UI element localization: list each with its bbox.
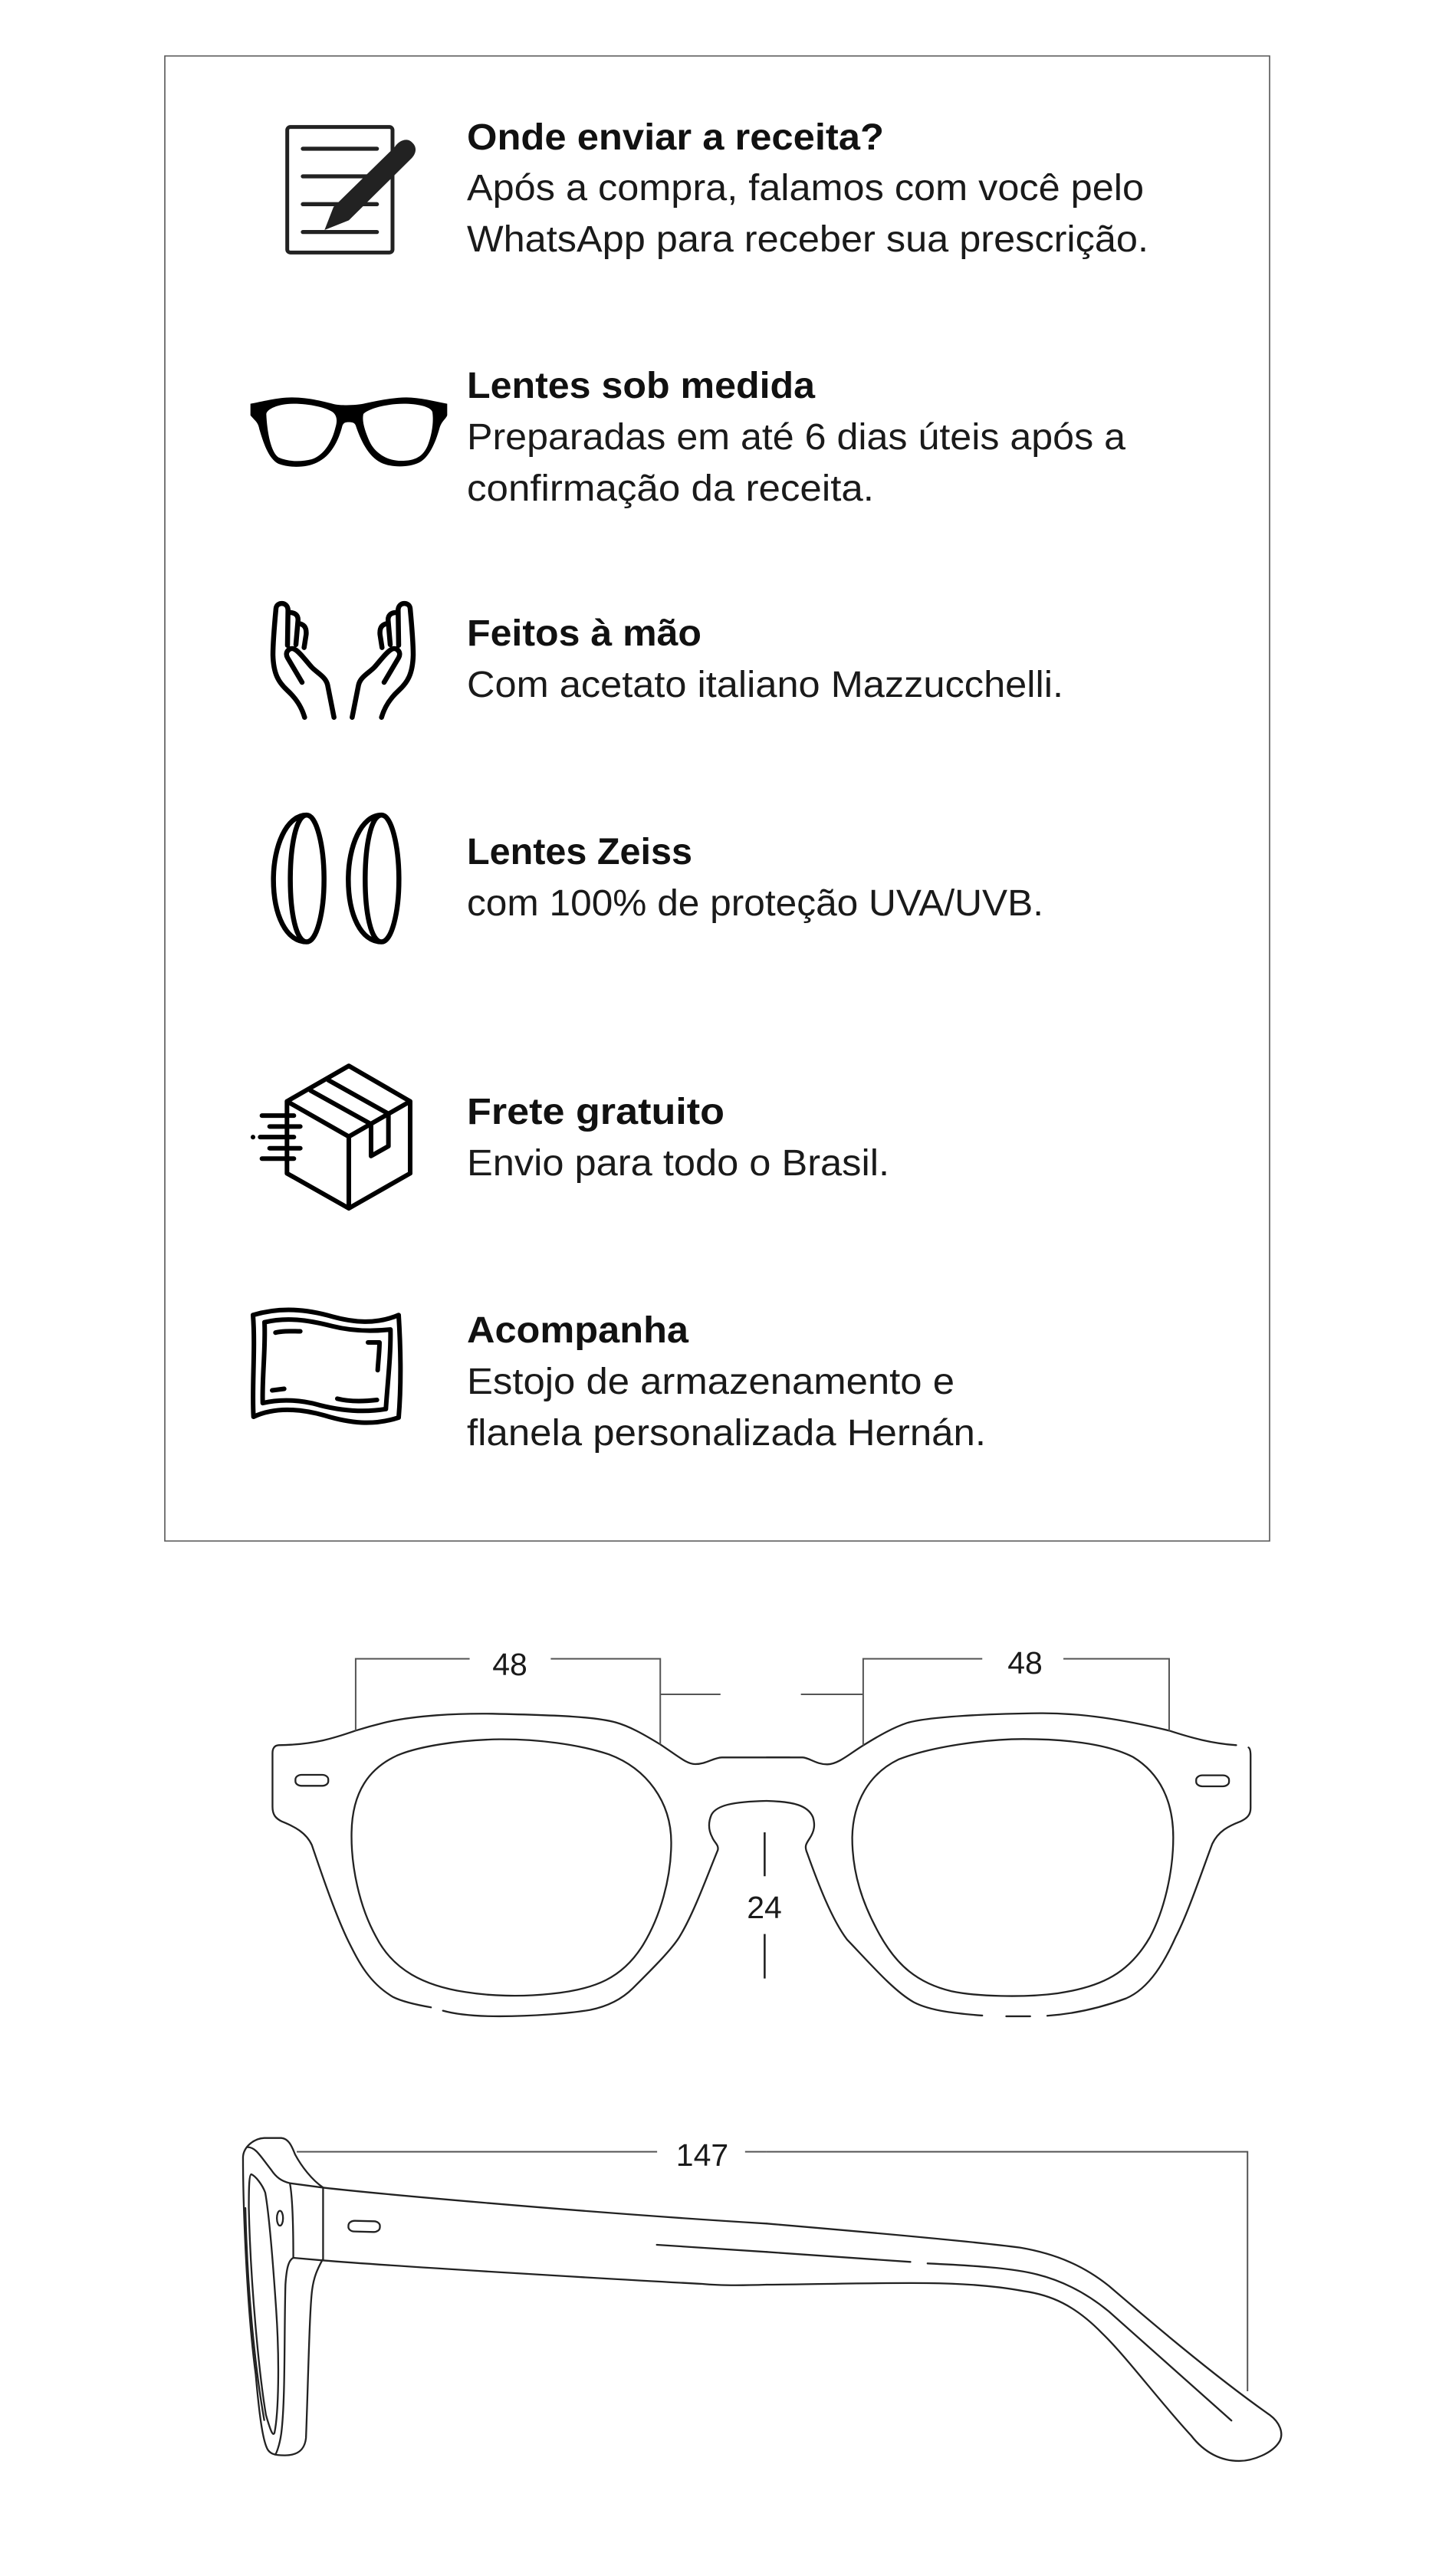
text: prescription: WhatsApp para receber sua prescrição. [467,219,1148,260]
dimension: right lens width: 48 [1007,1645,1043,1681]
text: handmade: Feitos à mão [467,613,702,654]
text: free shipping: Frete gratuito [467,1092,724,1132]
icon: open hands [273,603,413,718]
temple and frame left part [243,2138,767,2456]
icon: eyeglasses [251,397,447,467]
text: Zeiss lenses: Lentes Zeiss [467,832,692,872]
text: custom lenses: Preparadas em até 6 dias úteis após a [467,417,1125,458]
front frame right half [767,1714,1250,2016]
text: included accessories [467,1310,986,1454]
icon: shipping box [251,1066,410,1208]
text: Zeiss lenses: com 100% de proteção UVA/UVB. [467,883,1043,924]
diagram: side view of glasses [243,2137,1281,2461]
panel: product benefits [165,56,1270,1541]
text: prescription: Onde enviar a receita? [467,117,884,158]
dimension: left lens width [356,1647,721,1744]
text: handmade: Com acetato italiano Mazzucchelli. [467,665,1063,705]
text: custom lenses [467,366,1125,509]
text: prescription [467,117,1148,260]
dimension: left lens width: 48 [492,1647,527,1682]
dimension: bridge: 24 [747,1890,782,1925]
text: included accessories: Estojo de armazenamento e [467,1362,955,1402]
temple tip right part [767,2223,1281,2461]
dimension: temple length [297,2137,1247,2391]
text: handmade [467,613,1063,705]
text: free shipping: Envio para todo o Brasil. [467,1143,889,1184]
text: custom lenses: confirmação da receita. [467,468,874,509]
dimension: temple length: 147 [676,2137,728,2173]
dimension: right lens width [801,1645,1169,1746]
panel border [165,56,1270,1541]
text: free shipping [467,1092,889,1184]
text: prescription: Após a compra, falamos com você pelo [467,168,1144,209]
text: included accessories: flanela personalizada Hernán. [467,1413,986,1454]
text: Zeiss lenses [467,832,1043,924]
text: custom lenses: Lentes sob medida [467,366,815,406]
diagram: front view of glasses [272,1645,1250,2016]
text: included accessories: Acompanha [467,1310,688,1351]
icon: prescription document with pen [288,127,416,252]
icon: cleaning cloth [253,1310,400,1423]
front frame left half [272,1714,790,2016]
icon: lenses [274,815,399,942]
